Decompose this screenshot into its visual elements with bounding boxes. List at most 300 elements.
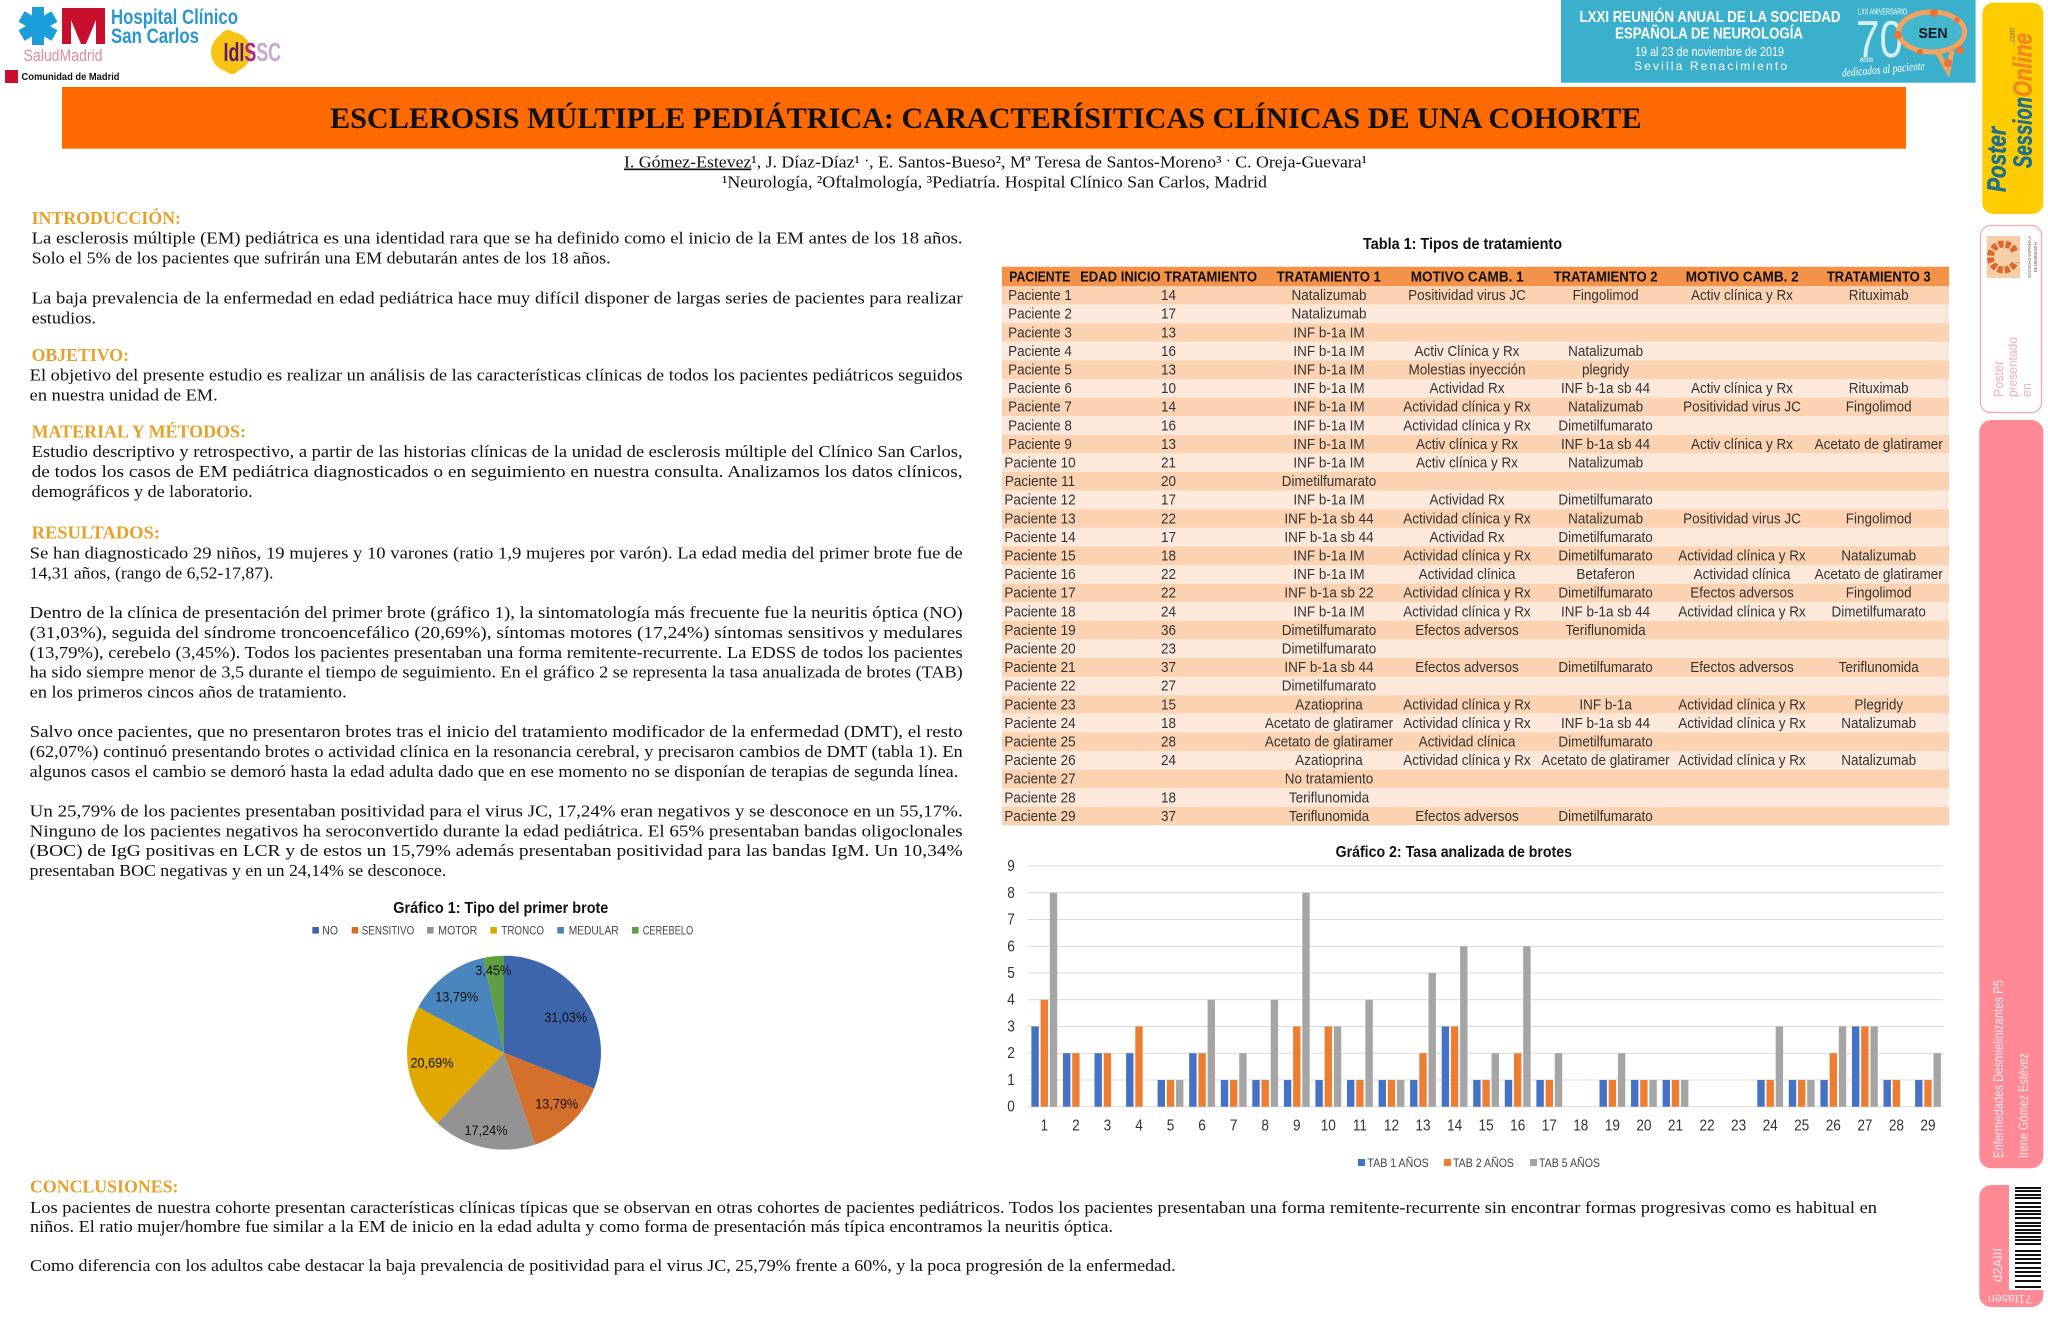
text block: resultados: Se han diagnosticado 29 niños, 19 mujeres y 10 varones (ratio 1,9 mujeres por varón). La edad media del primer brote fue de [30,544,963,562]
table body rows: Actividad clínica y Rx [1678,715,1806,732]
x axis labels: 11 [1353,1118,1367,1135]
logo caption: SOCIEDAD ESPAÑOLA [2026,236,2032,278]
anniversary 70 mark: LXX ANIVERSARIO [1858,8,1907,16]
table body rows: Paciente 27 [1004,771,1076,788]
table body rows: Activ clínica y Rx [1416,455,1518,472]
table body rows: 20 [1161,473,1176,490]
table body rows: Dimetilfumarato [1282,473,1376,490]
table body rows: INF b-1a sb 44 [1561,436,1650,453]
SEN speech-bubble ring logo: SEN [1918,25,1948,42]
badge text: .com [2007,28,2017,44]
table body rows: Actividad clínica y Rx [1403,511,1531,528]
x axis labels: 10 [1321,1118,1336,1135]
table body rows: INF b-1a IM [1293,566,1365,583]
text block: conclusiones: Como diferencia con los adultos cabe destacar la baja prevalencia de positividad para el virus JC, 25,79% frente a 60%, y la poca progresión de la enfermedad. [30,1256,1176,1275]
table body rows: Dimetilfumarato [1558,492,1653,509]
table body rows: Paciente 4 [1008,343,1072,360]
x axis labels: 23 [1731,1118,1746,1135]
table header row: TRATAMIENTO 1 [1277,270,1381,286]
table body rows: Paciente 15 [1004,548,1076,565]
table body rows: Fingolimod [1573,287,1639,304]
pie legend: TRONCO [501,924,544,938]
y axis labels: 3 [1007,1019,1015,1036]
table body rows: 27 [1161,678,1176,695]
text block: material y métodos: Estudio descriptivo y retrospectivo, a partir de las historias clínicas de la unidad de esclerosis múltiple del Clínico San Carlos, [32,442,963,461]
table body rows: Positividad virus JC [1408,287,1526,304]
table body rows: Actividad Rx [1430,380,1504,397]
heading: objetivo: OBJETIVO: [32,345,129,365]
table body rows: Paciente 17 [1004,585,1076,602]
table body rows: Actividad clínica y Rx [1678,604,1806,621]
y axis labels: 6 [1007,939,1015,956]
table body rows: 10 [1161,380,1176,397]
logo: Comunidad de Madrid [5,70,120,83]
anniversary 70 mark: 70 [1856,11,1903,69]
x axis labels: 21 [1668,1118,1683,1135]
table body rows: Actividad clínica y Rx [1678,697,1806,714]
authors and affiliations [624,152,1367,192]
logo caption [2026,236,2038,278]
table body rows: Paciente 29 [1004,808,1076,825]
table body rows: Natalizumab [1568,399,1643,416]
table header row: MOTIVO CAMB. 1 [1411,270,1524,286]
table body rows: Actividad clínica [1694,566,1790,583]
table body rows: Dimetilfumarato [1558,659,1653,676]
table body rows: INF b-1a sb 44 [1284,529,1374,546]
y axis labels: 9 [1007,858,1015,875]
pie percentage labels: 31,03% [544,1009,587,1025]
table body rows: Actividad clínica y Rx [1403,585,1531,602]
table body rows: Teriflunomida [1566,622,1646,639]
icon: red M [62,8,105,44]
table body rows: Dimetilfumarato [1558,418,1653,435]
logo text: hospital name [111,6,238,48]
banner text: 19 al 23 de noviembre de 2019 [1635,44,1784,59]
table body rows: Paciente 1 [1008,287,1072,304]
table body rows: Actividad Rx [1430,492,1504,509]
table body rows: 18 [1161,715,1176,732]
table body rows: Acetato de glatiramer [1815,436,1943,453]
banner text: Sevilla Renacimiento [1634,59,1787,73]
table body rows: Efectos adversos [1415,622,1519,639]
SEN speech-bubble ring logo [1894,9,1965,71]
section: material y métodos [32,420,963,501]
table body rows: 37 [1161,808,1176,825]
table body rows: 22 [1161,566,1176,583]
table body rows: Dimetilfumarato [1558,734,1653,751]
table body rows: Acetato de glatiramer [1265,734,1393,751]
pie legend: CEREBELO [643,924,693,938]
x axis labels: 19 [1605,1118,1620,1135]
table body rows: Dimetilfumarato [1558,808,1653,825]
pie legend [312,924,693,938]
table body rows: Paciente 18 [1004,604,1076,621]
table header row [1002,267,1949,286]
text: Poster presentado en: en [2020,383,2034,397]
text block: introducción: La esclerosis múltiple (EM) pediátrica es una identidad rara que se ha definido como el inicio de la EM antes de los 18 años. [32,228,963,248]
text block: objetivo [30,366,963,404]
x axis labels: 15 [1479,1118,1494,1135]
table body rows: Efectos adversos [1415,808,1519,825]
y axis labels: 0 [1007,1099,1015,1116]
text block: resultados: 14,31 años, (rango de 6,52-17,87). [30,564,273,582]
pie legend: NO [322,924,338,938]
x axis labels: 12 [1384,1118,1399,1135]
anniversary 70 mark [1841,8,1926,80]
y axis labels: 4 [1007,992,1015,1009]
anniversary 70 mark: dedicados al paciente [1841,59,1926,80]
bar chart legend: TAB 5 AÑOS [1539,1156,1600,1170]
table body rows: Paciente 2 [1008,306,1072,323]
table body rows: Dimetilfumarato [1558,529,1653,546]
pie legend: MEDULAR [569,924,619,938]
x axis labels: 27 [1857,1118,1872,1135]
y axis labels: 2 [1007,1045,1015,1062]
logo: Comunidad de Madrid: Comunidad de Madrid [22,72,120,83]
table body rows: Rituximab [1849,287,1909,304]
table body rows: 36 [1161,622,1176,639]
table body rows: Acetato de glatiramer [1265,715,1393,732]
table body rows: Actividad clínica y Rx [1403,548,1531,565]
text block: conclusiones: Los pacientes de nuestra cohorte presentan características clínicas típicas que se observan en otras cohortes de pacientes pediátricos. Todos los pacientes presentaban una forma remitente-recurrente sin encontrar formas progresivas como es habitual en [30,1198,1878,1217]
pie percentage labels: 13,79% [535,1096,578,1112]
banner text: LXXI REUNIÓN ANUAL DE LA SOCIEDAD [1580,7,1840,26]
text block: objetivo: en nuestra unidad de EM. [30,386,218,404]
table body rows: 14 [1161,287,1176,304]
heading: conclusiones: CONCLUSIONES: [30,1176,178,1196]
upside-down tag label: 71tasen [1988,1292,2032,1306]
conference banner: SEN [1561,0,1976,83]
pie percentage labels: 13,79% [435,988,478,1004]
table body rows: Molestias inyección [1409,362,1525,379]
table body rows: 17 [1161,492,1176,509]
x axis labels: 28 [1889,1118,1904,1135]
table body rows: Fingolimod [1846,585,1912,602]
x axis labels: 2 [1072,1118,1080,1135]
bar chart panel: Gráfico 2 [1007,844,1943,1170]
section: resultados [30,522,963,880]
text block: resultados: Salvo once pacientes, que no presentaron brotes tras el inicio del tratamiento modificador de la enfermedad (DMT), el resto [30,722,963,741]
table body rows: No tratamiento [1285,771,1373,788]
text block: material y métodos [32,442,963,501]
table body rows: Plegridy [1854,697,1904,714]
table body rows: Paciente 7 [1008,399,1072,416]
table body rows: INF b-1a IM [1293,436,1365,453]
text block: material y métodos: demográficos y de laboratorio. [32,482,253,501]
x axis labels: 17 [1542,1118,1557,1135]
table body rows: Teriflunomida [1839,659,1919,676]
badge text [1982,28,2038,192]
x axis labels: 26 [1826,1118,1841,1135]
table body rows: 37 [1161,659,1176,676]
table body rows: Efectos adversos [1690,585,1794,602]
text block: objetivo: El objetivo del presente estudio es realizar un análisis de las características clínicas de todos los pacientes pediátricos seguidos [30,366,963,384]
text block: resultados: (31,03%), seguida del síndrome troncoencefálico (20,69%), síntomas motores (17,24%) síntomas sensitivos y medulares [30,623,963,642]
table body rows: Rituximab [1849,380,1909,397]
table body rows: 18 [1161,790,1176,807]
pie slices [407,956,601,1150]
title: ESCLEROSIS MÚLTIPLE PEDIÁTRICA: CARACTERÍSITICAS CLÍNICAS DE UNA COHORTE [330,102,1642,135]
table body rows: Paciente 14 [1004,529,1076,546]
table body rows: Azatioprina [1295,697,1363,714]
table body rows: Paciente 9 [1008,436,1072,453]
table body rows: Paciente 8 [1008,418,1072,435]
table body rows: Dimetilfumarato [1282,678,1376,695]
logo: IdISSC: IdISSC [224,37,281,67]
bar chart legend [1358,1156,1600,1170]
heading: resultados: RESULTADOS: [32,522,160,542]
x axis labels: 24 [1763,1118,1778,1135]
banner text: ESPAÑOLA DE NEUROLOGÍA [1615,22,1803,42]
text block: resultados: ha sido siempre menor de 3,5 durante el tiempo de seguimiento. En el gráfico 2 se representa la tasa anualizada de brotes (TAB) [30,662,963,682]
text block: resultados: Dentro de la clínica de presentación del primer brote (gráfico 1), la sintomatología más frecuente fue la neuritis óptica (NO) [30,603,963,622]
table body rows: Dimetilfumarato [1832,604,1926,621]
table body rows: 16 [1161,418,1176,435]
x axis labels: 5 [1167,1118,1174,1135]
text: Poster presentado en: Poster [1992,361,2006,397]
pie percentage labels [410,962,587,1138]
table body rows: Actividad clínica y Rx [1403,604,1531,621]
barcode [2009,1185,2044,1290]
table body rows: Paciente 16 [1004,566,1076,583]
x axis labels: 22 [1700,1118,1715,1135]
y axis labels: 1 [1007,1072,1015,1089]
table body rows: INF b-1a IM [1293,399,1365,416]
banner text [1580,7,1840,73]
text block: resultados: algunos casos el cambio se demoró hasta la edad adulta dado que en ese momento no se disponían de terapias de segunda línea. [30,762,958,781]
title banner [62,87,1906,149]
x axis labels: 16 [1510,1118,1525,1135]
x axis labels: 9 [1293,1118,1301,1135]
table title: Tabla 1: Tipos de tratamiento [1363,236,1562,253]
table body rows: Dimetilfumarato [1558,548,1653,565]
table body rows: INF b-1a sb 44 [1561,715,1650,732]
table body rows: Paciente 11 [1005,473,1075,490]
table body rows: INF b-1a sb 44 [1284,659,1374,676]
table body rows: Natalizumab [1841,752,1916,769]
table body rows: Natalizumab [1841,715,1916,732]
text block: resultados: (BOC) de IgG positivas en LCR y de estos un 15,79% además presentaban positividad para las bandas IgM. Un 10,34% [30,841,963,860]
sidebar: barcode tag [1979,1185,2044,1307]
table body rows: 28 [1161,734,1176,751]
badge text: Session [2008,97,2038,168]
session text: Enfermedades Desmielinizantes P5 [1990,980,2006,1158]
table body rows: 17 [1161,306,1176,323]
table body rows: Actividad clínica y Rx [1403,697,1531,714]
session text: Irene Gómez Estévez [2015,1053,2031,1158]
table header row: TRATAMIENTO 3 [1827,270,1931,286]
table body rows: Paciente 23 [1004,697,1076,714]
table header row: EDAD INICIO TRATAMIENTO [1080,270,1257,286]
table body rows: 22 [1161,585,1176,602]
table body rows: Paciente 19 [1004,622,1076,639]
section: objetivo [30,345,963,404]
text block: resultados: en los primeros cincos años de tratamiento. [30,682,347,702]
table body rows: Natalizumab [1568,455,1643,472]
table body rows: Actividad clínica y Rx [1403,418,1531,435]
text block: resultados [30,544,963,880]
table body rows: INF b-1a IM [1293,380,1365,397]
text block: material y métodos: de todos los casos de EM pediátrica diagnosticados o en seguimiento en nuestra consulta. Analizamos los datos clínicos, [32,462,963,481]
table body rows: INF b-1a IM [1293,492,1365,509]
x axis labels: 4 [1135,1118,1143,1135]
table body rows: Paciente 13 [1004,511,1076,528]
table body rows: 21 [1161,455,1176,472]
icon: blue star cross [19,7,57,45]
table body rows: Efectos adversos [1690,659,1794,676]
chart title: Gráfico 2: Tasa analizada de brotes [1336,844,1572,861]
text block: introducción: Solo el 5% de los pacientes que sufrirán una EM debutarán antes de los 18 años. [32,248,611,268]
table body rows: Actividad clínica [1419,566,1515,583]
table body rows: Activ clínica y Rx [1416,436,1518,453]
text: Poster presentado en: presentado [2006,337,2020,397]
table body rows: Paciente 3 [1008,325,1072,342]
badge text: Poster [1982,125,2012,192]
tag code: d2AIII [1990,1248,2005,1282]
table body rows: 13 [1161,436,1176,453]
table body rows: Paciente 5 [1008,362,1072,379]
table body rows: INF b-1a sb 44 [1284,511,1374,528]
table body rows: 24 [1161,752,1176,769]
text block: resultados: presentaban BOC negativas y en un 24,14% se desconoce. [30,861,446,880]
table body rows: Activ clínica y Rx [1691,287,1793,304]
y axis labels: 7 [1007,912,1015,929]
table body rows: 13 [1161,325,1176,342]
table body rows: Paciente 26 [1004,752,1076,769]
y axis labels: 5 [1007,965,1015,982]
section: conclusiones [30,1176,1878,1275]
table body rows: 14 [1161,399,1176,416]
table body rows: 24 [1161,604,1176,621]
text block: resultados: Un 25,79% de los pacientes presentaban positividad para el virus JC, 17,24% eran negativos y se desconoce en un 55,17%. [30,802,963,820]
table body rows: Activ Clínica y Rx [1415,343,1519,360]
table body rows: INF b-1a IM [1293,548,1365,565]
text block: conclusiones: niños. El ratio mujer/hombre fue similar a la EM de inicio en la edad adulta y como forma de presentación más típica encontramos la neuritis óptica. [30,1217,1113,1236]
table body rows: INF b-1a sb 22 [1284,585,1374,602]
session text [1990,980,2031,1158]
table body rows: 15 [1161,697,1176,714]
table body rows: Azatioprina [1295,752,1363,769]
heading: material y métodos: MATERIAL Y MÉTODOS: [32,420,246,442]
table body rows: Paciente 25 [1004,734,1076,751]
table body rows: Positividad virus JC [1683,511,1801,528]
table body rows: INF b-1a IM [1293,418,1365,435]
x axis labels: 8 [1261,1118,1269,1135]
table panel: Tabla 1 [1002,236,1949,825]
x axis labels: 29 [1920,1118,1936,1135]
table body rows: 17 [1161,529,1176,546]
logo text: hospital name: San Carlos [111,25,199,48]
text block: introducción [32,228,963,328]
pie percentage labels: 20,69% [410,1054,454,1070]
table body rows: 23 [1161,641,1176,658]
table body rows: Natalizumab [1292,287,1367,304]
table body rows: Paciente 6 [1008,380,1072,397]
x axis labels: 3 [1104,1118,1111,1135]
text block: conclusiones [30,1198,1878,1275]
sidebar: PosterSessionOnline badge [1982,3,2043,214]
heading: introducción: INTRODUCCIÓN: [32,207,181,228]
x axis labels: 1 [1041,1118,1048,1135]
x axis labels [1041,1118,1936,1135]
x axis labels: 7 [1230,1118,1237,1135]
table body rows: INF b-1a sb 44 [1561,380,1650,397]
table body rows: Betaferon [1576,566,1635,583]
table body rows: plegridy [1582,362,1630,379]
table body rows: Actividad clínica y Rx [1678,548,1806,565]
table body rows: 22 [1161,511,1176,528]
table body rows: Natalizumab [1841,548,1916,565]
table body rows: Dimetilfumarato [1558,585,1653,602]
table body rows: Paciente 22 [1004,678,1076,695]
table body rows: INF b-1a IM [1293,455,1365,472]
logo: Hospital Clínico San Carlos and Salud Madrid [19,6,238,65]
table body rows: Fingolimod [1846,511,1912,528]
logo: IdISSC [211,30,281,74]
table body rows: INF b-1a IM [1293,343,1365,360]
text block: introducción: estudios. [32,308,96,328]
table body rows [1002,286,1949,825]
table body rows: Paciente 20 [1004,641,1076,658]
logo caption: DE NEUROLOGÍA [2032,242,2038,272]
table body rows: Dimetilfumarato [1282,622,1376,639]
x axis labels: 13 [1415,1118,1431,1135]
bar chart legend: TAB 2 AÑOS [1453,1156,1514,1170]
table body rows: Paciente 12 [1004,492,1076,509]
sidebar: session info panel [1979,420,2043,1168]
icon: brain logo [1987,236,2020,278]
table body rows: Actividad clínica y Rx [1403,715,1531,732]
table body rows: Natalizumab [1292,306,1367,323]
pie legend: SENSITIVO [362,924,414,938]
table body rows: Actividad clínica [1419,734,1515,751]
y axis labels [1007,858,1015,1116]
pie percentage labels: 17,24% [464,1122,508,1138]
table body rows: INF b-1a IM [1293,362,1365,379]
table body rows: Natalizumab [1568,511,1643,528]
text block: resultados: (62,07%) continuó presentando brotes o actividad clínica en la resonancia cerebral, y precisaron cambios de DMT (tabla 1). En [30,742,963,761]
table body rows: Actividad Rx [1430,529,1504,546]
logo text: hospital name: Hospital Clínico [111,6,238,29]
x axis labels: 20 [1636,1118,1651,1135]
pie legend: MOTOR [438,924,478,938]
table body rows: Teriflunomida [1289,790,1369,807]
x axis labels: 14 [1447,1118,1462,1135]
chart title: Gráfico 1: Tipo del primer brote [393,900,608,917]
table body rows: Actividad clínica y Rx [1678,752,1806,769]
table body rows: Acetato de glatiramer [1542,752,1670,769]
table body rows: Dimetilfumarato [1282,641,1376,658]
table body rows: Actividad clínica y Rx [1403,399,1531,416]
pie percentage labels: 3,45% [475,962,511,978]
text block: resultados: (13,79%), cerebelo (3,45%). Todos los pacientes presentaban una forma remitente-recurrente. La EDSS de todos los pacientes [30,643,963,662]
table body rows: Natalizumab [1568,343,1643,360]
table body rows: Efectos adversos [1415,659,1519,676]
x axis labels: 6 [1198,1118,1206,1135]
authors and affiliations: ¹Neurología, ²Oftalmología, ³Pediatría. Hospital Clínico San Carlos, Madrid [722,172,1268,192]
text block: introducción: La baja prevalencia de la enfermedad en edad pediátrica hace muy difícil disponer de largas series de pacientes para realizar [32,288,963,308]
table body rows: Paciente 28 [1004,790,1076,807]
table header row: TRATAMIENTO 2 [1554,270,1658,286]
authors and affiliations: I. Gómez-Estevez ¹, J. Díaz-Díaz¹ ˑ, E. Santos-Bueso², Mª Teresa de Santos-Moreno³ ˑ C. Oreja-Guevara¹ [624,152,1367,172]
bar chart legend: TAB 1 AÑOS [1367,1156,1429,1170]
text: Poster presentado en [1992,337,2034,397]
bars: TAB 1, 2 and 5 años per patient [1031,893,1941,1107]
table body rows: INF b-1a [1579,697,1632,714]
table body rows: Positividad virus JC [1683,399,1801,416]
badge text: Online [2008,33,2038,97]
y axis labels: 8 [1007,885,1015,902]
